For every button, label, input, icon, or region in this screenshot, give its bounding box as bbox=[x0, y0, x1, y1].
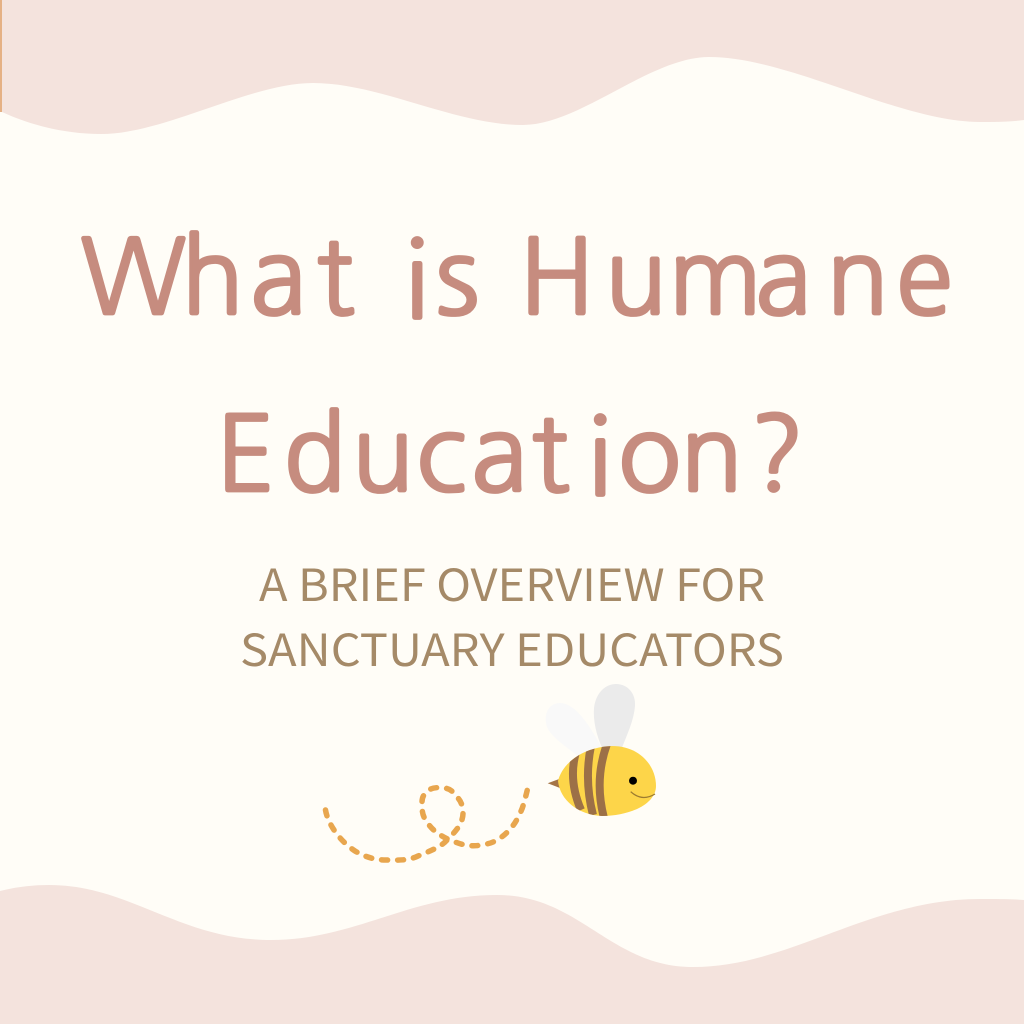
bee stinger bbox=[548, 779, 560, 788]
subtitle line 2: SANCTUARY EDUCATORS bbox=[240, 615, 784, 679]
bee stripes bbox=[573, 744, 607, 818]
left edge accent line bbox=[0, 0, 2, 112]
bee smile bbox=[631, 792, 655, 797]
title bbox=[80, 225, 953, 506]
top wave band bbox=[0, 0, 1024, 134]
bee eye bbox=[629, 777, 637, 785]
title line 2: Education? bbox=[216, 402, 805, 506]
bottom wave band bbox=[0, 885, 1024, 1024]
icon: bee bbox=[546, 684, 656, 818]
subtitle bbox=[240, 550, 784, 679]
bee far wing bbox=[546, 703, 604, 756]
bee body bbox=[558, 746, 656, 816]
title line 1: What is Humane bbox=[80, 225, 953, 329]
dashed flight path bbox=[326, 785, 528, 860]
bee near wing bbox=[594, 684, 635, 750]
subtitle line 1: A BRIEF OVERVIEW FOR bbox=[259, 550, 765, 614]
